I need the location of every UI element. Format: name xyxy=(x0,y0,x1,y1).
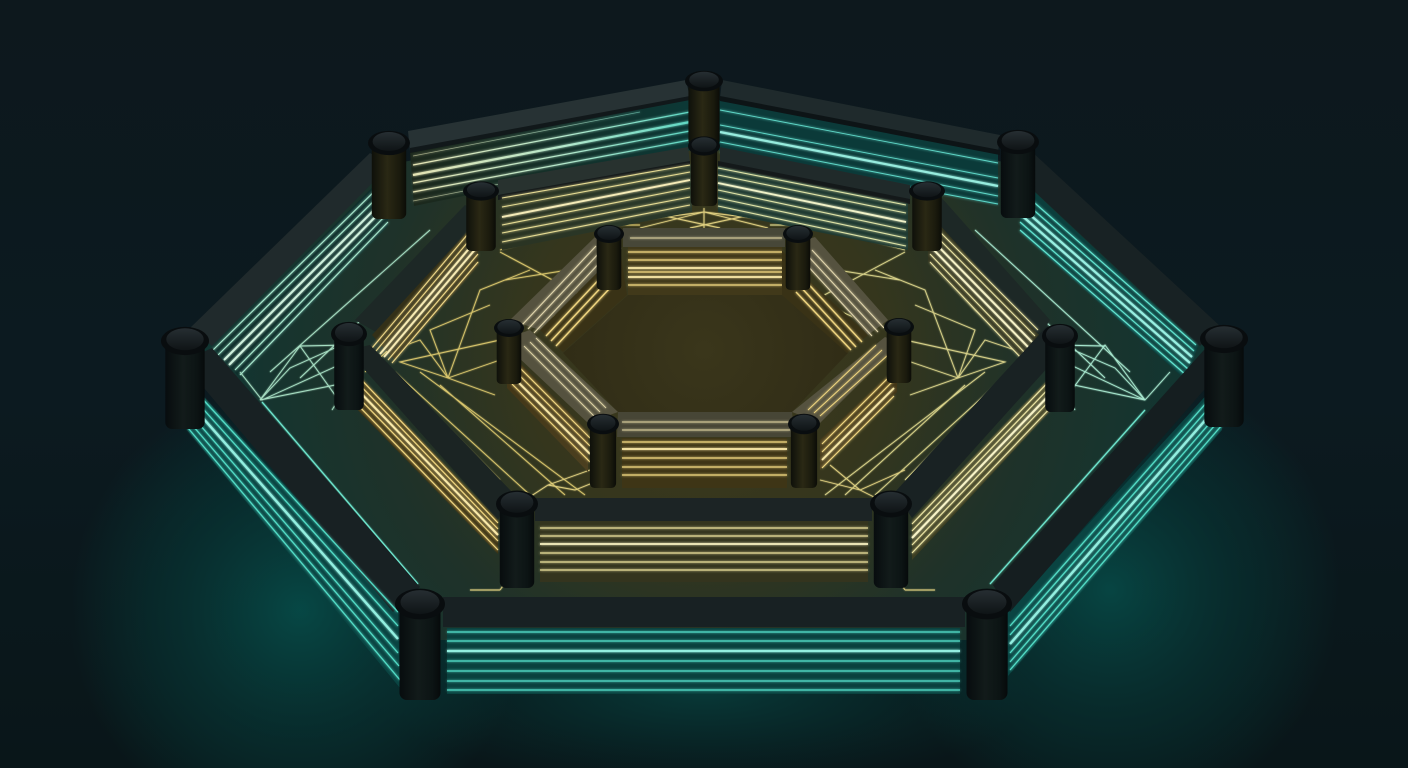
posts: outer front xyxy=(161,325,1248,700)
posts: outer back xyxy=(368,71,1039,219)
floor: inner hexagon xyxy=(563,295,848,412)
middle ring: front panels xyxy=(331,322,1078,588)
wires: yellow right web xyxy=(770,225,1040,495)
middle ring: back panels xyxy=(355,136,1050,363)
posts: middle back xyxy=(463,136,945,251)
panel: middle top-right xyxy=(718,147,910,250)
wires: yellow left web xyxy=(365,225,640,495)
panel: inner lower-left xyxy=(500,330,618,472)
posts: inner ring xyxy=(494,225,914,488)
panel: middle lower-right xyxy=(895,326,1068,560)
panel: inner lower-right xyxy=(792,337,900,470)
panel: outer lower-right xyxy=(993,350,1232,676)
panel: middle top-left xyxy=(498,147,692,250)
panel: outer top-right xyxy=(718,80,1000,205)
panel: outer upper-right side xyxy=(1018,150,1220,380)
panel: middle bottom xyxy=(535,498,872,582)
wires: front hubs xyxy=(470,465,935,590)
floor: heptagon base xyxy=(190,100,1215,640)
panel: middle upper-right side xyxy=(925,196,1050,362)
inner ring xyxy=(494,225,914,488)
panel: inner upper-right xyxy=(782,237,888,353)
panel: inner top xyxy=(623,228,785,295)
wires: teal left cluster xyxy=(240,230,440,410)
floor wires: geometric line web xyxy=(240,208,1170,590)
panel: middle lower-left xyxy=(347,345,512,554)
panel: outer lower-left xyxy=(182,348,420,688)
panel: middle upper-left side xyxy=(355,205,486,363)
panel: inner bottom xyxy=(617,412,795,488)
panel: inner upper-left xyxy=(510,237,627,352)
posts: middle front xyxy=(331,322,1078,588)
panel: outer upper-left side xyxy=(190,153,390,378)
panel: outer top-left xyxy=(408,80,692,206)
wires: top hub xyxy=(600,208,810,228)
wires: teal right cluster xyxy=(965,230,1170,410)
outer ring: back panels xyxy=(190,71,1220,380)
panel: outer bottom xyxy=(443,597,965,694)
wires: bright teal diagonal edges xyxy=(262,402,1145,584)
outer ring: front panels xyxy=(161,325,1248,700)
